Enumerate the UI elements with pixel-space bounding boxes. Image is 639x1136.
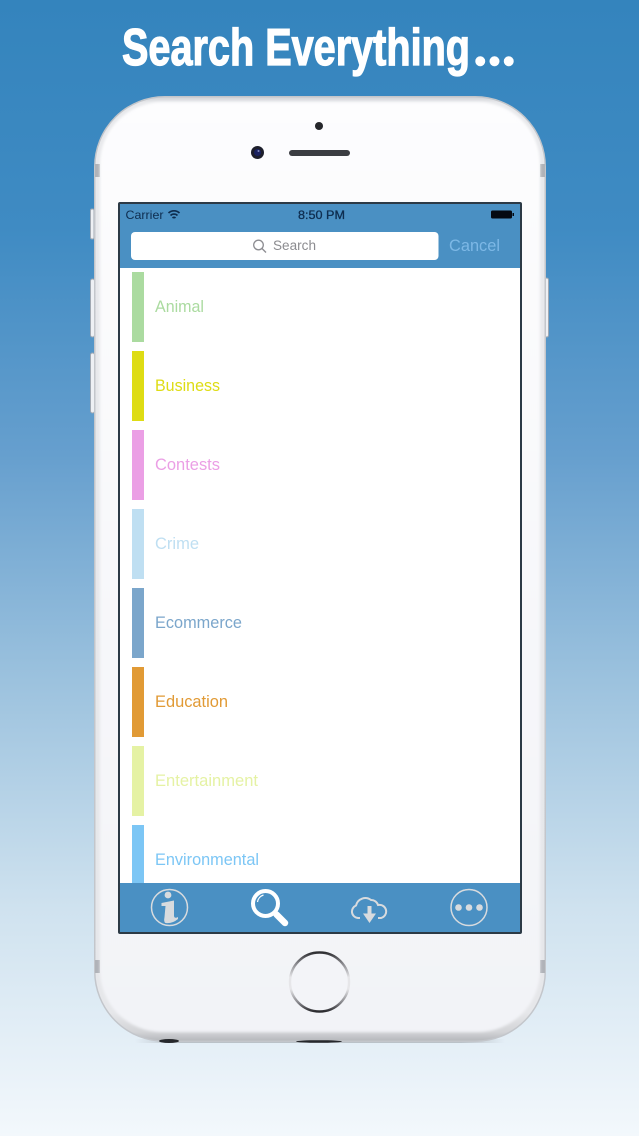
clock: 8:50 PM (298, 208, 345, 222)
icon: cloud download (352, 898, 386, 923)
row: Crime (132, 509, 199, 579)
title: ... (473, 13, 516, 78)
search icon (254, 240, 266, 252)
row: Animal (132, 272, 204, 342)
phone (90, 97, 548, 1043)
row: Entertainment (132, 746, 258, 816)
row: Crime: Crime (155, 535, 199, 553)
phone shadow at base (135, 1039, 505, 1043)
earpiece speaker (289, 150, 350, 156)
side buttons (90, 209, 548, 413)
row: Contests (132, 430, 220, 500)
row: Education: Education (155, 693, 228, 711)
row: Ecommerce: Ecommerce (155, 614, 242, 632)
battery icon (491, 210, 514, 218)
bottom port openings (159, 1039, 342, 1043)
front camera (251, 146, 264, 159)
phone antenna bands (95, 164, 545, 973)
row: Environmental: Environmental (155, 851, 259, 869)
status bar (126, 208, 514, 222)
list area (120, 268, 520, 883)
category list (132, 272, 259, 883)
row: Business: Business (155, 377, 220, 395)
row: Contests: Contests (155, 456, 220, 474)
carrier: Carrier (126, 208, 164, 222)
row: Entertainment: Entertainment (155, 772, 258, 790)
search field (131, 232, 438, 260)
proximity sensor (315, 122, 323, 130)
icon: info (152, 890, 188, 926)
icon: search (active) (253, 891, 285, 923)
title: Search Everything (122, 19, 470, 77)
row: Environmental (132, 825, 259, 883)
screen border (118, 202, 522, 934)
row: Animal: Animal (155, 298, 204, 316)
phone front face (100, 102, 540, 1032)
wifi icon (168, 211, 180, 218)
row: Ecommerce (132, 588, 242, 658)
cancel button: Cancel (449, 237, 500, 255)
row: Education (132, 667, 228, 737)
home button (290, 952, 350, 1012)
phone body rim (95, 97, 545, 1041)
search placeholder: Search (273, 238, 316, 253)
app screen (118, 202, 522, 934)
row: Business (132, 351, 220, 421)
tab bar (120, 883, 520, 932)
navigation header (120, 204, 520, 268)
icon: more (451, 890, 487, 926)
